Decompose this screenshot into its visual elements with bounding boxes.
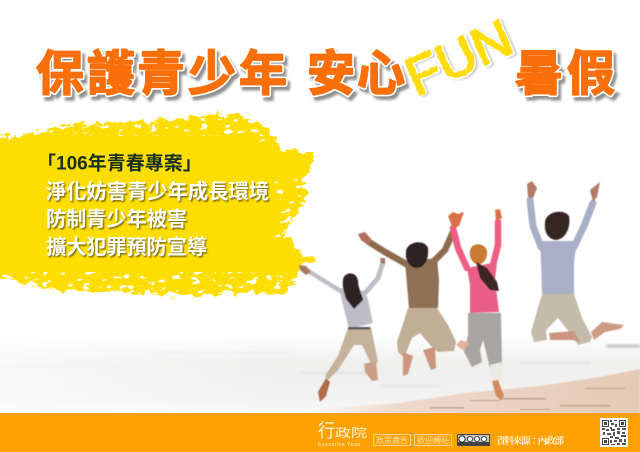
text line 1: 淨化妨害青少年成長環境 [47,181,270,205]
person 1: girl in grey top [299,258,385,402]
text line 1: 淨化妨害青少年成長環境 [46,180,269,204]
title lettering: 保護青少年 [36,48,287,101]
text line 2: 防制青少年被害 [47,208,188,232]
title shadow: 暑假 [518,52,618,105]
title lettering: 暑假 [515,48,615,101]
Executive Yuan logo: 政院 [335,426,367,440]
title outline: 暑假 [515,48,615,101]
orange footer bar [0,413,640,452]
creative commons badge [457,434,490,446]
FUN lettering: FUN [397,9,521,107]
brush stroke white flecks [0,118,315,294]
QR code [600,418,628,447]
title shadow [39,52,618,105]
title lettering: 安心 [307,48,405,101]
title outline: 保護青少年 [36,48,287,101]
FUN lettering: FUN [397,9,521,107]
title outline [36,48,615,101]
FUN lettering: FUN [400,10,524,108]
title lettering [36,48,615,101]
person 4: grey-blue sweater [527,181,624,345]
panel text: project summary [37,152,270,260]
button: policy ads: 政策廣告 [376,435,408,445]
jumping people photo [299,181,624,402]
button: welcome to repost: 歡迎轉貼 [417,435,449,445]
heading: 106 youth project: 「106年青春專案」 [37,152,202,174]
beach photo background [0,335,640,415]
Executive Yuan logo: Executive Yuan [318,442,361,448]
yellow brush stroke panel [0,114,315,296]
title shadow: 保護青少年 [39,52,290,105]
Executive Yuan logo: 行 [318,420,335,442]
Executive Yuan logo [318,420,367,448]
text line 2: 防制青少年被害 [46,207,187,231]
title outline: 安心 [307,48,405,101]
text line 3: 擴大犯罪預防宣導 [46,235,207,259]
title [36,48,618,105]
text line 3: 擴大犯罪預防宣導 [47,236,208,260]
person 2: brown jacket [358,232,456,376]
data source: 資料來源：內政部 [496,434,564,447]
person 3: pink jacket [448,209,504,400]
title shadow: 安心 [310,52,408,105]
